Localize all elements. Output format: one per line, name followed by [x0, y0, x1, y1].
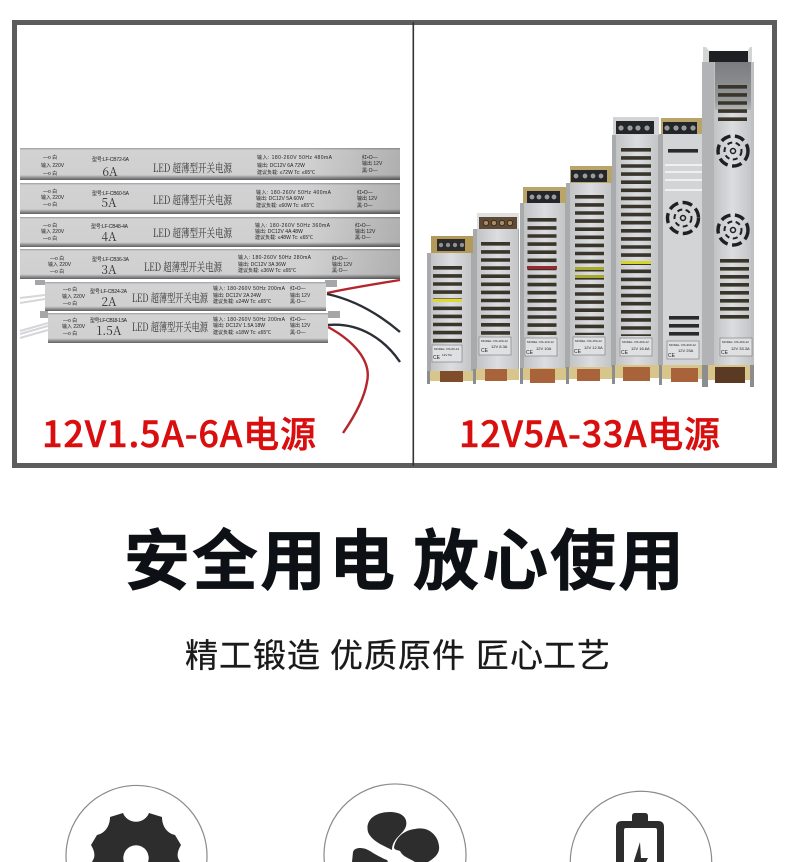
unit: 60W: CE [433, 355, 441, 361]
strip: 5A [20, 183, 400, 214]
strip: 3A: 建议负载: ≤36W Tc: ≤65℃ [238, 267, 296, 274]
strip: 4A: 输出: DC12V 4A 48W [255, 228, 303, 235]
strip: 2A: 建议负载: ≤24W Tc: ≤65℃ [213, 298, 271, 305]
strip: 6A: 输出: DC12V 6A 72W [257, 162, 305, 169]
panel: left slim power supplies [20, 148, 400, 433]
strip: 6A: 黑·O— [362, 168, 378, 174]
strip: 5A: —o 白 [43, 201, 57, 208]
icon: fan [324, 784, 466, 862]
unit: 300W: CE [668, 353, 676, 359]
subtitle: 精工锻造 优质原件 匠心工艺 [185, 629, 610, 677]
strip: 3A: 黑·O— [332, 268, 348, 274]
strip: 6A: 6A [102, 163, 118, 180]
unit: 120W: CE [526, 350, 534, 356]
unit: 100W: 12V 8.3A [491, 344, 508, 349]
strip: 4A: —o 白 [43, 222, 57, 229]
strip: 5A: 型号:LF-CB60-5A [92, 190, 130, 197]
strip: 6A: —o 白 [43, 170, 57, 177]
unit: 200W: CE [621, 350, 629, 356]
unit: 120W: MODEL: DS-120-12 [527, 340, 554, 344]
strip: 1.5A: 黑·O— [290, 330, 306, 336]
unit: 60W: 12V 5A [442, 353, 452, 357]
strip: 4A [20, 217, 400, 247]
strip: 3A [20, 249, 400, 279]
icon: gear [66, 785, 207, 862]
strip: 1.5A [48, 313, 328, 343]
unit: 200W [612, 117, 659, 384]
strip: 5A: 5A [101, 194, 117, 211]
strip: 5A: 输入 220V [41, 194, 65, 201]
strip: 6A: 输入: 180-260V 50Hz 480mA [257, 154, 333, 161]
strip: 1.5A: 输出: DC12V 1.5A 18W [213, 322, 265, 329]
strip: 5A: 红•O— [357, 189, 373, 196]
unit: 400W: MODEL: DS-400-12 [722, 340, 749, 344]
caption: right range: 12V5A-33A电源 [459, 406, 720, 458]
strip: 2A: 输出: DC12V 2A 24W [213, 292, 261, 299]
strip: 4A: 型号:LF-CB48-4A [91, 223, 129, 230]
strip: 6A: 红•O— [362, 154, 378, 161]
unit: 200W: 12V 16.6A [631, 346, 650, 351]
unit: 400W: CE [721, 350, 729, 356]
strip: 5A: 输出 12V [357, 195, 378, 202]
unit: 150W: MODEL: DS-150-12 [575, 339, 602, 343]
unit: 100W [473, 213, 519, 384]
strip: 5A: —o 白 [43, 188, 57, 195]
strip: 5A: 建议负载: ≤60W Tc: ≤65℃ [256, 202, 314, 209]
strip: 4A: 4A [101, 228, 117, 245]
unit: 100W: MODEL: DS-100-12 [481, 339, 508, 343]
strip: 2A: 输出 12V [290, 292, 311, 299]
strip: 4A: —o 白 [43, 235, 57, 242]
strip: 5A: 黑·O— [357, 203, 373, 209]
strip: 3A: 输入 220V [48, 261, 72, 268]
panel: right enclosed power supplies [427, 47, 754, 387]
strip: 2A: 输入 220V [62, 293, 86, 300]
strip: 6A [20, 148, 400, 180]
strip: 3A: 型号:LF-CB36-3A [92, 256, 130, 263]
unit: 400W [702, 47, 754, 387]
unit: 300W [659, 118, 704, 385]
strip: 6A: 输入 220V [41, 162, 65, 169]
unit: 200W: MODEL: DS-200-12 [622, 340, 649, 344]
strip: 4A: 输入 220V [41, 228, 65, 235]
strip: 3A: 3A [101, 261, 117, 278]
unit: 150W: 12V 12.5A [584, 345, 603, 350]
strip: 3A: —o 白 [50, 268, 64, 275]
unit: 120W: 12V 10A [536, 346, 552, 351]
strip: 2A: 黑·O— [290, 299, 306, 305]
strip: 6A: —o 白 [43, 154, 57, 161]
unit: 60W [427, 236, 473, 384]
strip: 3A: 输出 12V [332, 261, 353, 268]
strip: 4A: 黑·O— [355, 235, 371, 241]
strip: 3A: 输入: 180-260V 50Hz 280mA [238, 254, 312, 261]
wires: output and input cables [20, 280, 400, 433]
strip: 2A: 型号:LF-CB24-2A [90, 288, 128, 295]
strip: 1.5A: —o 白 [63, 317, 77, 324]
strip: 2A: 输入: 180-260V 50Hz 200mA [213, 285, 286, 292]
fan grille [668, 202, 698, 234]
fan grille [718, 136, 748, 166]
strip: 4A: 输出 12V [355, 228, 376, 235]
strip: 1.5A: 红•O— [290, 316, 306, 323]
strip: 1.5A: 型号:LF-CB18-1.5A [90, 317, 128, 324]
strip: 6A: LED 超薄型开关电源 [153, 160, 232, 176]
unit: 120W [520, 187, 566, 384]
unit: 150W: CE [574, 349, 582, 355]
unit: 150W [566, 166, 612, 384]
strip: 6A: 建议负载: ≤72W Tc: ≤65℃ [257, 169, 315, 176]
icon: battery [570, 791, 712, 862]
unit: 300W: MODEL: DS-300-12 [669, 343, 696, 347]
strip: 3A: 红•O— [332, 255, 348, 262]
strip: 2A: —o 白 [63, 300, 77, 307]
strip: 1.5A: 1.5A [97, 322, 122, 339]
strip: 2A: LED 超薄型开关电源 [132, 290, 208, 306]
strip: 1.5A: 建议负载: ≤18W Tc: ≤65℃ [213, 329, 271, 336]
panel: product comparison frame [14, 22, 774, 466]
strip: 4A: 输入: 180-260V 50Hz 360mA [255, 222, 331, 229]
caption: left range: 12V1.5A-6A电源 [42, 406, 316, 458]
strip: 6A: 输出 12V [362, 160, 383, 167]
strip: 5A: 输出: DC12V 5A 60W [256, 195, 304, 202]
strip: 1.5A: 输出 12V [290, 322, 311, 329]
unit: 300W: 12V 25A [678, 348, 694, 353]
strip: 5A: LED 超薄型开关电源 [153, 192, 232, 208]
strip: 1.5A: 输入 220V [62, 323, 86, 330]
unit: 60W: MODEL: DS-60-12 [434, 347, 460, 351]
fan grille [718, 215, 748, 245]
strip: 5A: 输入: 180-260V 50Hz 400mA [256, 189, 332, 196]
strip: 4A: 红•O— [355, 222, 371, 229]
strip: 1.5A: —o 白 [63, 330, 77, 337]
strip: 2A: —o 白 [63, 286, 77, 293]
strip: 2A [45, 282, 326, 311]
strip: 2A: 红•O— [290, 285, 306, 292]
strip: 1.5A: LED 超薄型开关电源 [132, 319, 208, 335]
unit: 100W: CE [481, 348, 489, 354]
strip: 6A: 型号:LF-CB72-6A [92, 156, 130, 163]
strip: 4A: 建议负载: ≤48W Tc: ≤65℃ [255, 234, 313, 241]
strip: 3A: —o 白 [50, 255, 64, 262]
strip: 3A: 输出: DC12V 3A 36W [238, 261, 286, 268]
strip: 3A: LED 超薄型开关电源 [144, 259, 222, 275]
title: 安全用电 放心使用 [124, 508, 684, 604]
strip: 4A: LED 超薄型开关电源 [153, 225, 232, 241]
strip: 1.5A: 输入: 180-260V 50Hz 200mA [213, 316, 286, 323]
unit: 400W: 12V 33.3A [731, 346, 750, 351]
strip: 2A: 2A [101, 293, 117, 310]
